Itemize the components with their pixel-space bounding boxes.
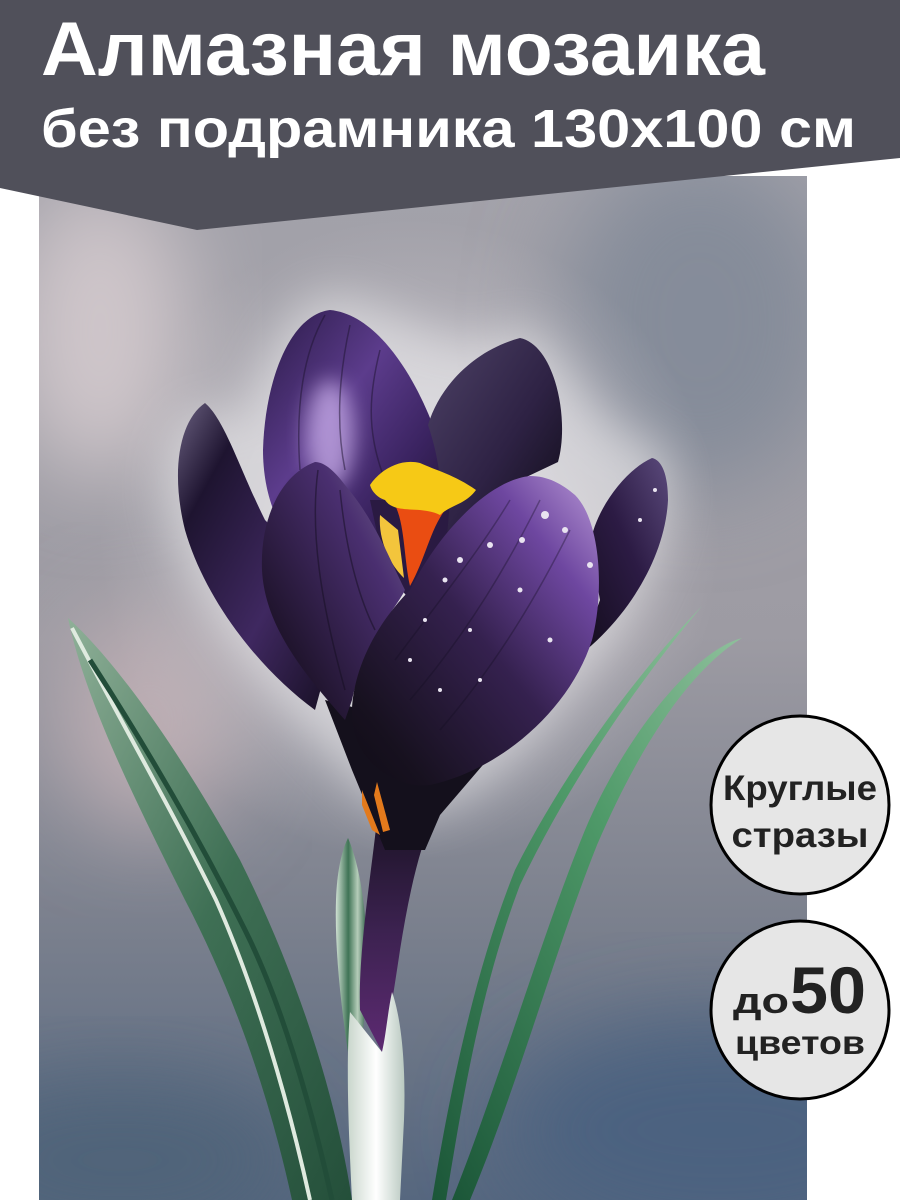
orange stem marks	[362, 782, 390, 835]
right small petal	[590, 458, 668, 647]
flower base	[325, 700, 500, 850]
flower interior	[370, 500, 450, 600]
badge: round rhinestones	[711, 716, 889, 894]
badge: round rhinestones: стразы	[732, 816, 868, 855]
stamen: orange pistil	[395, 505, 445, 586]
stamen: yellow head	[370, 462, 476, 515]
white stem sheath	[348, 992, 404, 1200]
subtitle: без подрамника 130х100 см	[41, 99, 856, 159]
painting: crocus flower artwork	[39, 176, 807, 1200]
badge: up to 50 colours: 50	[790, 953, 866, 1027]
front left petal	[262, 462, 405, 720]
painting background	[39, 176, 807, 1200]
badge: up to 50 colours: до	[733, 980, 789, 1021]
left broad leaf	[68, 618, 352, 1200]
back top petal	[263, 310, 439, 534]
centre small leaf	[336, 838, 365, 1052]
back right petal	[428, 338, 562, 545]
right grass blade 2	[452, 638, 742, 1200]
left outer petal	[178, 403, 320, 710]
badge: up to 50 colours	[711, 921, 889, 1099]
title: Алмазная мозаика	[41, 7, 766, 92]
flower stem	[360, 832, 422, 1052]
badge: round rhinestones: Круглые	[723, 769, 877, 808]
header banner	[0, 0, 900, 230]
right grass blade 1	[432, 606, 702, 1200]
water droplets	[408, 488, 657, 692]
front large petal	[352, 476, 599, 786]
stamen: yellow left anther	[380, 515, 404, 578]
badge: up to 50 colours: цветов	[735, 1024, 865, 1061]
